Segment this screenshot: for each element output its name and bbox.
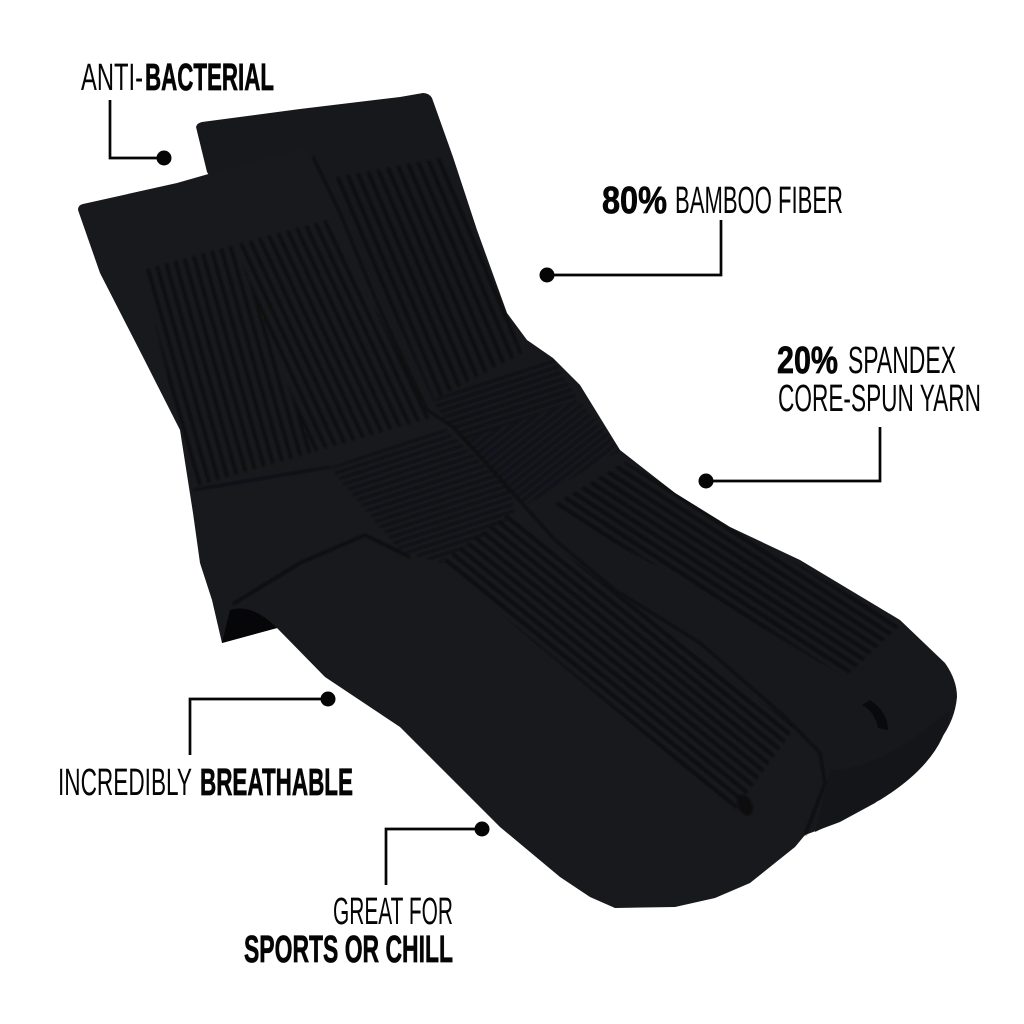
callout: anti-bacterial: ANTI- xyxy=(81,57,143,99)
callout: anti-bacterial: BACTERIAL xyxy=(145,57,274,99)
infographic canvas xyxy=(60,63,980,963)
sock fold line between the socks xyxy=(313,157,825,835)
callout: sports or chill xyxy=(244,822,490,971)
callout: spandex yarn: SPANDEX xyxy=(848,340,956,382)
socks product photo xyxy=(78,93,957,908)
leg bottom fold xyxy=(193,467,330,490)
toe bump xyxy=(734,792,756,818)
callout: spandex yarn: 20% xyxy=(777,340,838,382)
back sock xyxy=(196,93,957,835)
callout: bamboo fiber: BAMBOO FIBER xyxy=(675,180,843,222)
front sock xyxy=(78,149,825,908)
callout: sports or chill: GREAT FOR xyxy=(333,891,453,933)
callout: bamboo fiber xyxy=(540,180,843,282)
callout: spandex yarn xyxy=(698,340,981,488)
callout: anti-bacterial xyxy=(81,57,274,166)
callout: sports or chill: SPORTS OR CHILL xyxy=(244,929,453,971)
callout: breathable xyxy=(58,692,353,804)
callout: breathable: BREATHABLE xyxy=(200,762,353,804)
callout: bamboo fiber: 80% xyxy=(602,180,667,222)
heel flap edge xyxy=(233,535,410,604)
callout: breathable: INCREDIBLY xyxy=(58,762,192,804)
inner heel opening xyxy=(222,608,277,643)
